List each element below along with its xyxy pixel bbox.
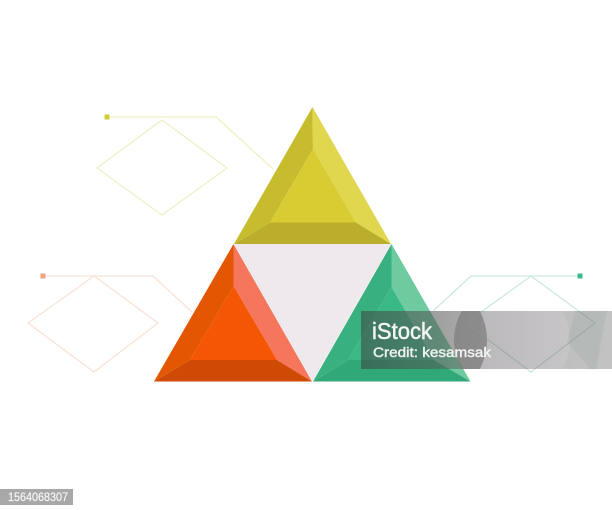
green marker square xyxy=(578,274,582,278)
yellow callout: connector and diamond xyxy=(97,117,273,215)
dark lens overlap xyxy=(454,311,487,369)
large pale circle xyxy=(454,311,568,369)
watermark credit text: Credit: kesamsak xyxy=(373,345,491,360)
yellow diamond outline xyxy=(97,120,227,215)
orange marker square xyxy=(40,274,46,278)
orange pyramid xyxy=(154,244,312,382)
green pyramid xyxy=(313,244,470,382)
green callout: connector and diamond xyxy=(433,276,595,372)
image id stamp xyxy=(0,489,73,505)
watermark band xyxy=(361,311,612,369)
yellow marker square xyxy=(104,114,110,120)
orange callout: connector and diamond xyxy=(28,276,192,372)
green diamond outline xyxy=(466,276,595,372)
green connector line xyxy=(433,276,580,311)
infographic canvas xyxy=(0,107,612,505)
image id number: 1564068307 xyxy=(8,492,68,504)
right translucent shard xyxy=(567,311,607,369)
yellow pyramid xyxy=(234,107,391,244)
orange diamond outline xyxy=(28,276,158,372)
yellow connector line xyxy=(107,117,273,169)
orange connector line xyxy=(43,276,192,312)
watermark brand text: iStock xyxy=(372,318,432,344)
central pale triangle xyxy=(234,244,391,382)
